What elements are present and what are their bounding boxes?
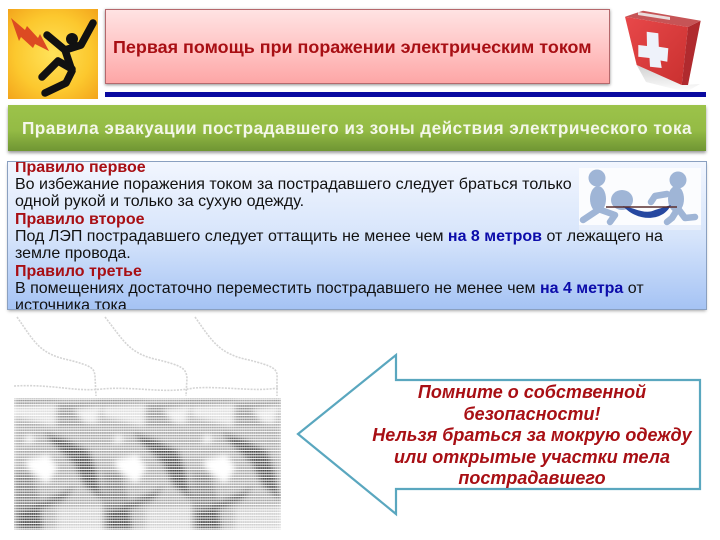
rule three heading: Правило третье <box>15 262 142 280</box>
panel: evacuation rules <box>8 162 706 309</box>
rule two text <box>15 228 663 262</box>
callout text: пострадавшего <box>458 468 606 488</box>
rule three text <box>15 280 644 309</box>
callout text: или открытые участки тела <box>394 446 670 466</box>
rule two text: земле провода. <box>15 245 131 262</box>
subtitle text: Правила эвакуации пострадавшего из зоны действия электрического тока <box>22 118 692 138</box>
callout text: Помните о собственной <box>418 382 646 402</box>
icon: electric shock warning <box>8 9 98 99</box>
callout text: безопасности! <box>464 404 600 424</box>
rule two text: Под ЛЭП пострадавшего следует оттащить не менее чем на 8 метров от лежащего на <box>15 228 663 245</box>
icon: first aid kit <box>625 10 701 88</box>
title text: Первая помощь при поражении электрическим током <box>113 37 592 57</box>
subtitle banner <box>8 105 706 151</box>
illustration: figures carrying a stretcher <box>579 168 701 230</box>
callout text: Нельзя браться за мокрую одежду <box>372 425 692 445</box>
callout text <box>372 382 692 488</box>
divider line <box>105 92 706 97</box>
rule three text: В помещениях достаточно переместить пострадавшего не менее чем на 4 метра от <box>15 280 644 296</box>
rule one text: Во избежание поражения током за пострадавшего следует браться только <box>15 176 572 193</box>
rule two heading: Правило второе <box>15 210 144 228</box>
rule one text <box>15 176 572 210</box>
illustration: halftone safety image <box>14 316 281 530</box>
title banner <box>105 9 610 84</box>
callout arrow <box>296 352 702 516</box>
rule one text: одной рукой и только за сухую одежду. <box>15 193 304 210</box>
